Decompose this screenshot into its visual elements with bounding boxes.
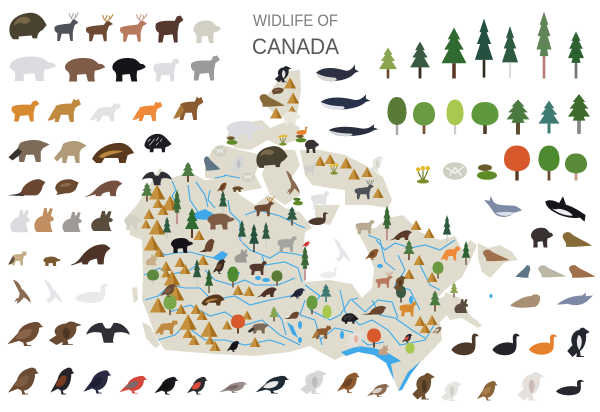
- lichen: [213, 145, 227, 157]
- tree green: [538, 145, 560, 181]
- vulture: [86, 323, 130, 343]
- flower: [330, 164, 338, 175]
- raven: [83, 370, 111, 393]
- title: [252, 12, 339, 59]
- cougar: [155, 320, 178, 334]
- arctic fox: [90, 103, 121, 121]
- red fox: [132, 102, 162, 121]
- owl: [394, 276, 406, 290]
- title: CANADA: [252, 34, 339, 59]
- canada goose: [308, 212, 328, 225]
- snowy spruce: [502, 26, 518, 78]
- wolverine: [92, 143, 134, 163]
- polar bear: [10, 57, 56, 81]
- bald eagle: [8, 368, 39, 395]
- beaver: [8, 179, 45, 196]
- loon: [556, 380, 584, 395]
- bowhead whale: [316, 64, 359, 81]
- white goat: [124, 215, 142, 230]
- fisher: [390, 230, 412, 240]
- teal cypress: [538, 100, 560, 134]
- birds: [7, 280, 590, 401]
- grouse: [365, 249, 379, 260]
- rabbit: [378, 345, 389, 355]
- wolf: [278, 236, 297, 252]
- ptarmigan: [230, 156, 246, 172]
- polar bear: [227, 121, 263, 140]
- eider: [296, 127, 308, 135]
- gull: [44, 280, 62, 304]
- dark broadleaf: [568, 94, 590, 134]
- vulture: [142, 172, 172, 185]
- canada goose: [451, 334, 479, 355]
- swan: [75, 284, 109, 303]
- cottontail: [62, 212, 82, 232]
- blackbird: [154, 377, 178, 394]
- nightjar: [219, 382, 248, 393]
- map: rivers: [144, 175, 455, 345]
- map: mountains: [141, 78, 438, 351]
- goat: [304, 163, 317, 175]
- harbor seal: [515, 265, 530, 278]
- fisher: [257, 287, 277, 298]
- caribou: [54, 12, 78, 41]
- red bird: [302, 241, 310, 247]
- petrel: [286, 171, 300, 195]
- moss: [477, 164, 497, 180]
- eider: [529, 334, 557, 355]
- blackbird: [227, 341, 240, 352]
- flower plant: [416, 166, 430, 184]
- orca: [545, 196, 586, 222]
- brant: [492, 334, 520, 355]
- lemming: [232, 186, 244, 192]
- coyote: [173, 97, 203, 120]
- trees: top rows: [379, 12, 590, 184]
- hawk: [217, 183, 227, 192]
- fisher: [71, 244, 111, 266]
- raccoon: [8, 140, 50, 162]
- arctic wolf: [311, 191, 330, 209]
- beaver: [284, 312, 300, 319]
- ringed seal: [538, 265, 566, 277]
- walrus: [510, 294, 540, 308]
- pelican: [345, 331, 366, 347]
- murre: [567, 328, 590, 357]
- pale goat: [283, 111, 301, 126]
- ptarmigan: [300, 370, 327, 394]
- kangaroo rat: [146, 255, 157, 265]
- larch: [379, 48, 397, 78]
- marine mammals: [316, 64, 596, 308]
- horned owl: [477, 381, 498, 400]
- moss under eider: [296, 135, 306, 142]
- black bear: [171, 238, 193, 253]
- map: animals: [124, 66, 510, 355]
- hawk: [49, 321, 82, 345]
- kangaroo rat: [8, 251, 27, 266]
- porcupine: [341, 313, 359, 324]
- harp seal: [569, 265, 596, 278]
- apple tree: [472, 102, 498, 134]
- beaver: [361, 306, 386, 315]
- razorbill: [275, 66, 291, 82]
- scots pine: [507, 99, 529, 135]
- grouse: [337, 373, 360, 393]
- humpback whale: [484, 196, 522, 217]
- long-eared owl: [412, 373, 435, 400]
- brown walrus: [563, 232, 592, 247]
- cougar: [47, 99, 81, 122]
- coyote: [312, 325, 331, 339]
- map: land of Canada: [128, 70, 518, 390]
- rabbit: [455, 299, 468, 313]
- moss: [226, 136, 238, 145]
- berry shrub: [565, 154, 587, 180]
- mountain goat: [193, 20, 221, 43]
- oak: [413, 102, 435, 134]
- bullfinch: [187, 377, 208, 394]
- dark seal: [305, 140, 319, 153]
- sea lion: [531, 228, 553, 248]
- snowshoe hare: [10, 210, 30, 232]
- grizzly: [207, 213, 235, 230]
- map: lakes: [192, 209, 492, 391]
- gull: [334, 239, 350, 263]
- bighorn sheep: [155, 15, 183, 42]
- title: WIDLIFE OF: [253, 12, 338, 30]
- beaver: [199, 239, 215, 252]
- fir: [442, 28, 466, 78]
- tall pine: [537, 12, 551, 78]
- mammals: large: [8, 12, 221, 266]
- golden eagle: [7, 322, 43, 346]
- bighorn: [250, 261, 267, 275]
- bobcat: [54, 141, 87, 163]
- map: trees: [141, 162, 470, 358]
- black spruce: [475, 18, 493, 78]
- wolverine: [201, 294, 225, 306]
- lichen: [241, 172, 255, 182]
- moose: [86, 14, 113, 41]
- sparrow: [432, 327, 442, 334]
- moss: [293, 198, 303, 205]
- lichen: [443, 162, 467, 180]
- muskrat: [272, 88, 284, 94]
- otter: [86, 180, 122, 197]
- swan: [319, 267, 339, 278]
- grizzly bear: [65, 58, 105, 81]
- capercaillie grouse: [50, 368, 74, 395]
- lemming: [43, 257, 61, 266]
- arctic wolf: [153, 58, 180, 82]
- dark pine: [568, 31, 584, 79]
- birch: [446, 99, 464, 135]
- rabbit: [235, 250, 248, 262]
- fin whale: [329, 124, 378, 136]
- raven: [289, 288, 305, 299]
- grey seal: [204, 156, 220, 171]
- maple red: [504, 145, 530, 181]
- seal: [483, 250, 510, 261]
- crossbill: [119, 376, 147, 393]
- bullfinch: [402, 334, 412, 343]
- hawk: [213, 259, 226, 274]
- snowy owl: [370, 156, 384, 172]
- narwhal: [557, 292, 593, 305]
- snowy owl: [441, 381, 462, 401]
- lynx: [11, 100, 39, 122]
- spruce: [410, 42, 430, 78]
- musk ox: [256, 146, 288, 168]
- dark rabbit: [91, 211, 113, 231]
- caribou: [355, 179, 374, 199]
- sparrow: [367, 384, 390, 397]
- moose: [254, 196, 274, 216]
- pelican: [517, 372, 544, 401]
- flower: [279, 135, 287, 146]
- muskrat: [55, 179, 79, 195]
- elk: [376, 272, 393, 288]
- olive tree: [388, 97, 406, 135]
- musk ox: [9, 13, 47, 39]
- sea lion: [260, 94, 285, 107]
- black bear: [112, 58, 146, 81]
- blue whale: [321, 94, 370, 110]
- elk: [120, 14, 147, 42]
- magpie: [256, 376, 289, 393]
- brown hare: [34, 208, 54, 232]
- raccoon: [248, 323, 269, 334]
- grey wolf: [191, 56, 220, 80]
- pale wolf: [356, 220, 375, 234]
- eagle: [160, 284, 176, 297]
- red fox: [441, 246, 460, 260]
- porcupine: [144, 134, 172, 152]
- petrel: [13, 280, 31, 304]
- lynx: [400, 302, 417, 316]
